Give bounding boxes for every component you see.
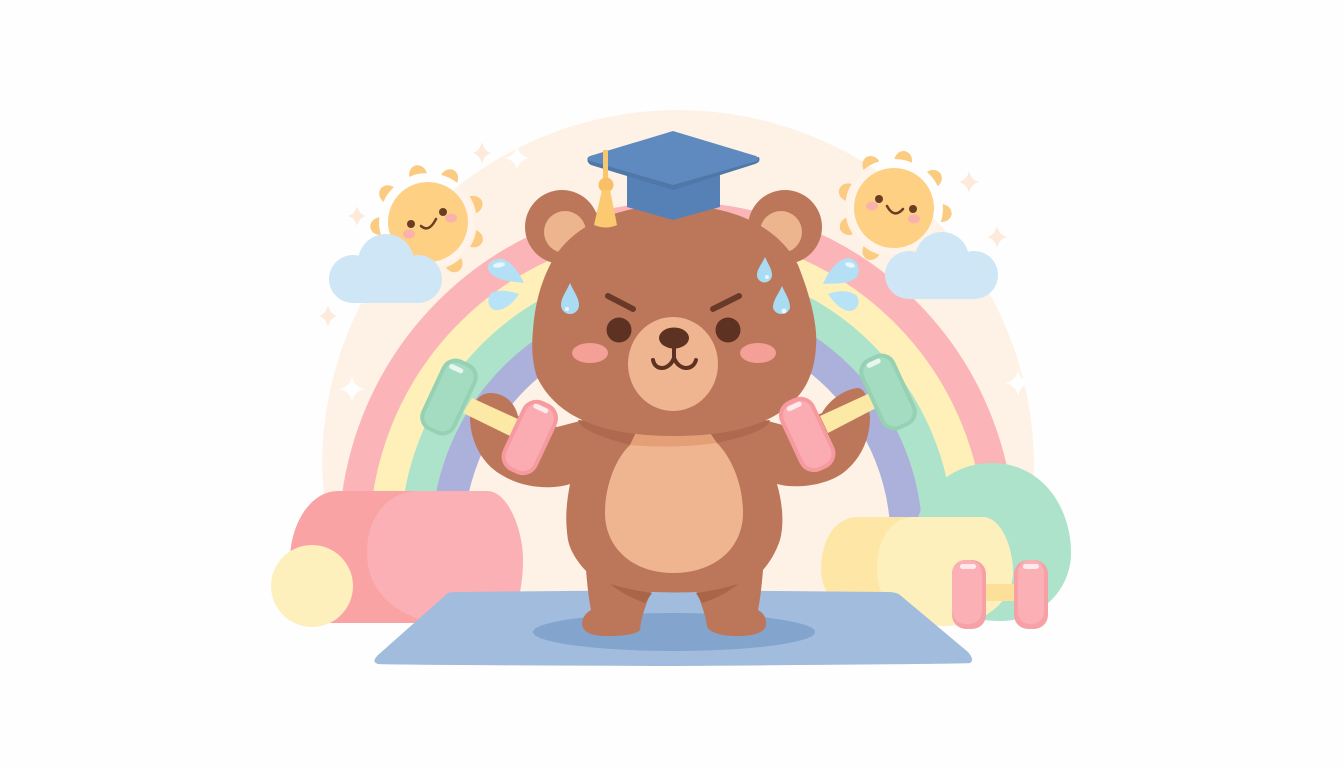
mat shadow [533, 613, 815, 651]
flying sweat drops [488, 258, 859, 311]
green bush [913, 463, 1071, 621]
nose [659, 328, 689, 348]
bear head [532, 205, 816, 436]
leg creases [610, 584, 738, 603]
muzzle [628, 317, 718, 411]
rainbow [355, 218, 999, 540]
mouth [653, 346, 696, 368]
neck shadow [578, 420, 770, 445]
right sun [836, 149, 953, 263]
left arm [470, 393, 610, 487]
yoga mat [374, 590, 972, 666]
bear body [566, 420, 782, 592]
neck highlight [630, 430, 717, 447]
bear legs [582, 560, 766, 636]
bear [418, 131, 919, 636]
tassel [594, 150, 617, 228]
floor dumbbell [952, 560, 1048, 629]
sweat drops on face [561, 257, 790, 314]
right arm [740, 388, 870, 486]
right hand dumbbell [776, 351, 919, 475]
pink foam roller [290, 491, 523, 623]
eyebrows [608, 296, 739, 309]
right ear [748, 190, 822, 264]
cheeks [572, 343, 776, 363]
left sun [369, 163, 486, 276]
left cloud [329, 234, 442, 303]
eyes [606, 318, 740, 342]
yellow ball [271, 545, 353, 627]
yellow foam roller [821, 517, 1013, 626]
cream arch backdrop [322, 110, 1034, 600]
left ear [525, 190, 599, 264]
left hand dumbbell [418, 356, 561, 478]
sparkles [319, 142, 1031, 402]
bear belly [605, 430, 743, 573]
graduation cap [587, 131, 760, 228]
right cloud [885, 232, 998, 299]
